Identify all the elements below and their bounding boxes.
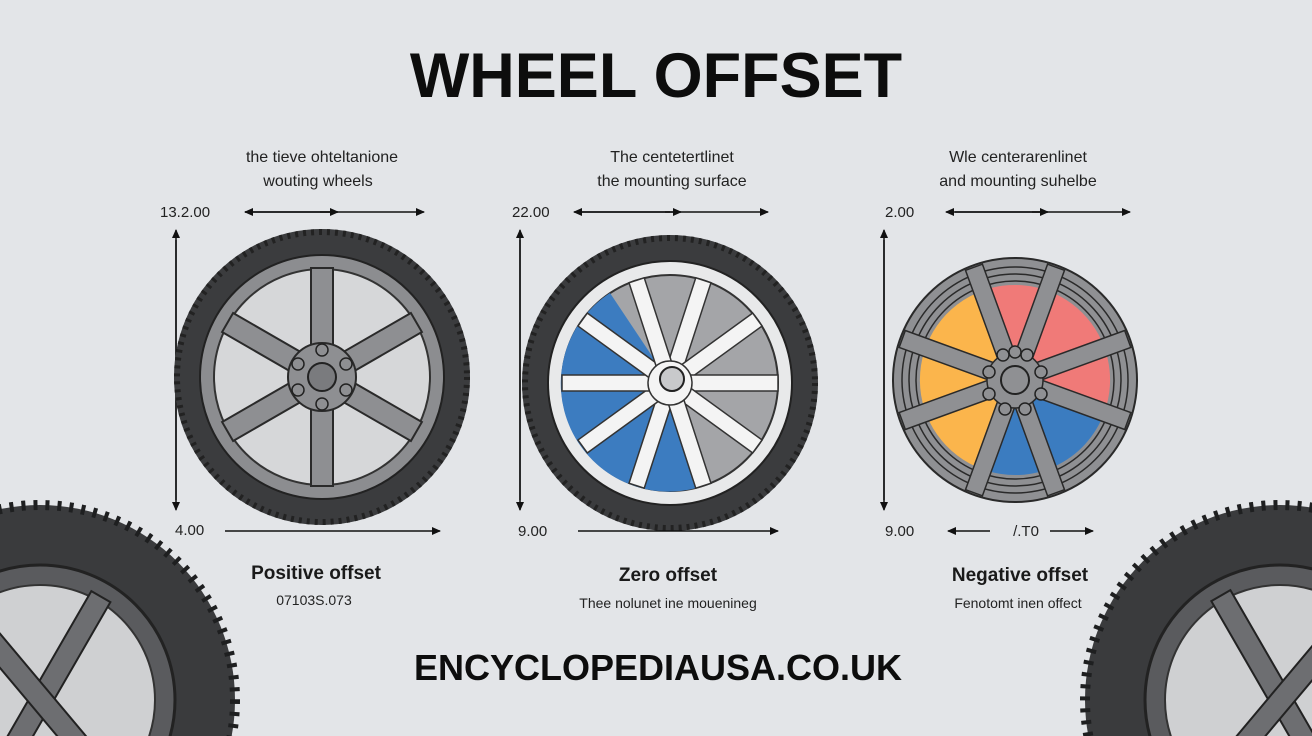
caption text middle: the mounting surface [597, 173, 747, 190]
label: negative offset [952, 565, 1089, 611]
dimension top left: 13.2.00 [160, 204, 210, 221]
wheel: zero [522, 235, 818, 531]
dimension bottom right: 9.00 [885, 523, 914, 540]
dimension bottom left: 4.00 [175, 522, 204, 539]
vertical arrow middle [519, 230, 521, 510]
label: negative offset: Negative offset [952, 565, 1089, 586]
wheel: negative [893, 258, 1137, 502]
label: positive offset: Positive offset [251, 563, 382, 584]
corner tire: bottom right [1085, 505, 1312, 736]
dimension top right: 2.00 [885, 204, 914, 221]
vertical arrow right [883, 230, 885, 510]
caption text right: Wle centerarenlinet [949, 149, 1087, 166]
label: zero offset [579, 565, 757, 611]
footer website: ENCYCLOPEDIAUSA.CO.UK [414, 647, 902, 688]
corner tire: bottom left [0, 505, 235, 736]
panel: negative offset [884, 149, 1137, 611]
label: negative offset: Fenotomt inen offect [954, 595, 1082, 611]
dimension bottom right: /.T0 [1013, 523, 1039, 540]
dimension top middle: 22.00 [512, 204, 550, 221]
label: zero offset: Zero offset [619, 565, 718, 586]
label: zero offset: Thee nolunet ine mouenineg [579, 595, 757, 611]
label: positive offset [251, 563, 382, 608]
caption text right [939, 149, 1097, 190]
caption text left: the tieve ohteltanione [246, 149, 398, 166]
caption text middle [597, 149, 747, 190]
label: positive offset: 07103S.073 [276, 592, 352, 608]
caption text left: wouting wheels [262, 173, 373, 190]
caption text left [246, 149, 398, 190]
caption text right: and mounting suhelbe [939, 173, 1097, 190]
vertical arrow left [175, 230, 177, 510]
wheel: positive [174, 229, 470, 525]
title: WHEEL OFFSET [410, 41, 902, 111]
panel: positive offset [160, 149, 470, 608]
dimension bottom middle: 9.00 [518, 523, 547, 540]
panel: zero offset [512, 149, 818, 611]
dimension bottom right [885, 523, 1093, 540]
caption text middle: The centetertlinet [610, 149, 734, 166]
